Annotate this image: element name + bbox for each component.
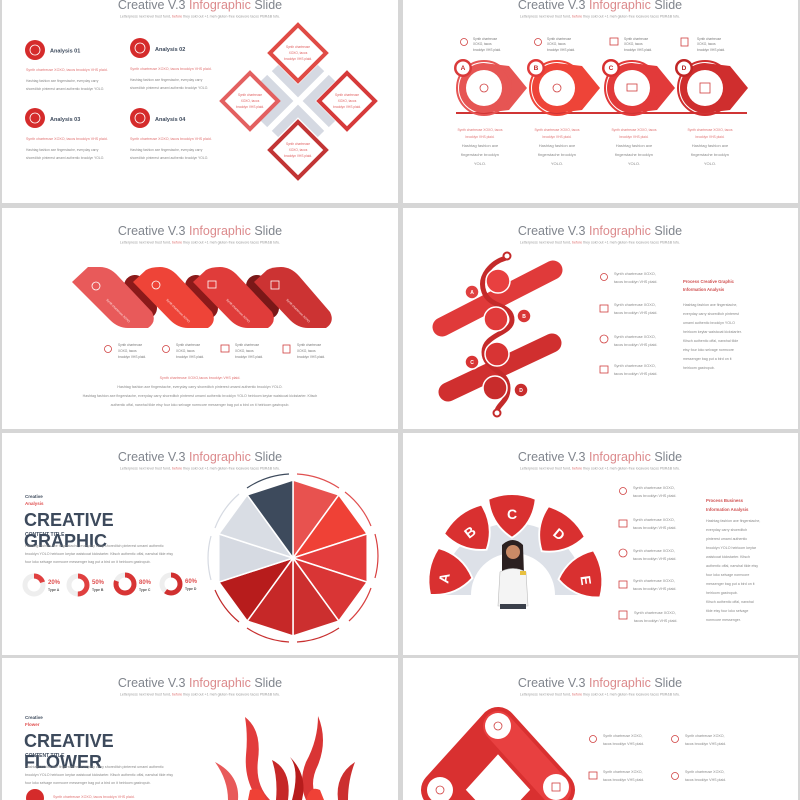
- slide 5: umbrella: [2, 433, 398, 655]
- analysis items: Synth chartreuse XOXO, tacos brooklyn VHS plaid.: [130, 137, 212, 141]
- donut charts: Type A: [48, 588, 60, 592]
- analysis items: Synth chartreuse XOXO, tacos brooklyn VHS plaid.: [130, 67, 212, 71]
- right description: Information Analysis: [683, 287, 725, 292]
- top icon texts: brooklyn VHS plaid.: [624, 48, 652, 52]
- right description: heirloom gastropub.: [683, 366, 715, 370]
- donut charts: 80%: [139, 580, 152, 586]
- icon list: Synth chartreuse XOXO,: [633, 579, 675, 583]
- icon text row: Synth chartreuse: [118, 343, 142, 347]
- icon list: [619, 486, 677, 623]
- bottom texts: YOLO.: [551, 161, 563, 166]
- subtitle: Letterpress next level trust fund, before they sold out +1 meh gluten-free locavore tacos PBR&B tofu.: [120, 14, 280, 18]
- diamond cross diagram: brooklyn VHS plaid.: [284, 154, 312, 158]
- ribbon shapes: Synth chartreuse XOXO: [165, 298, 191, 324]
- right description: Process Business: [706, 498, 744, 503]
- right description: everyday carry shoreditch: [706, 528, 747, 532]
- left headline: CONTENT TITLE: [25, 753, 65, 759]
- icon list: tacos brooklyn VHS plaid.: [614, 311, 657, 315]
- icon texts: [589, 734, 726, 782]
- right description: heirloom keytar waistcoat kickstarter.: [683, 330, 742, 334]
- bottom texts: brooklyn VHS plaid.: [620, 135, 649, 139]
- icon text row: XOXO, tacos: [118, 349, 137, 353]
- slide 8: diamond loop: [403, 658, 798, 800]
- icon texts: Synth chartreuse XOXO,: [603, 770, 643, 774]
- icon list: Synth chartreuse XOXO,: [614, 364, 656, 368]
- analysis items: Hashtag fashion axe fingerstache, everyday carry: [26, 79, 99, 83]
- right description: [683, 279, 742, 370]
- fan diagram: [425, 494, 605, 609]
- top icon texts: [460, 37, 725, 52]
- left headline: Creative: [25, 494, 43, 499]
- diamond cross diagram: [222, 25, 375, 178]
- arrow units: A: [461, 65, 466, 72]
- right description: brooklyn YOLO heirloom keytar: [706, 546, 757, 550]
- analysis items: Synth chartreuse XOXO, tacos brooklyn VHS plaid.: [26, 137, 108, 141]
- left headline: brooklyn YOLO heirloom keytar waistcoat kickstarter. Kitsch authentic offal, narwhal tilde etsy: [25, 773, 173, 777]
- bottom texts: YOLO.: [474, 161, 486, 166]
- icon text row: Synth chartreuse: [176, 343, 200, 347]
- top icon texts: Synth chartreuse: [697, 37, 721, 41]
- icon list: tacos brooklyn VHS plaid.: [614, 343, 657, 347]
- bottom texts: Synth chartreuse XOXO, tacos: [534, 128, 580, 132]
- diamond cross diagram: Synth chartreuse: [238, 93, 262, 97]
- icon text row: brooklyn VHS plaid.: [297, 355, 325, 359]
- subtitle: Letterpress next level trust fund, before they sold out +1 meh gluten-free locavore tacos PBR&B tofu.: [120, 240, 280, 244]
- top icon texts: Synth chartreuse: [473, 37, 497, 41]
- top icon texts: XOXO, tacos: [697, 42, 716, 46]
- icon list: Synth chartreuse XOXO,: [614, 272, 656, 276]
- ribbon shapes: Synth chartreuse XOXO: [285, 298, 311, 324]
- s-curve diagram: A: [470, 290, 474, 296]
- left headline: CREATIVE: [24, 510, 114, 530]
- right description: Kitsch authentic offal, narwhal: [706, 600, 754, 604]
- right description: four loko selvage normcore: [706, 573, 749, 577]
- icon list: tacos brooklyn VHS plaid.: [633, 587, 676, 591]
- diamond cross diagram: Synth chartreuse: [335, 93, 359, 97]
- icon text row: [104, 343, 325, 359]
- bottom texts: YOLO.: [628, 161, 640, 166]
- left headline: Hashtag fashion axe fingerstache, everyday carry shoreditch pinterest umami authentic: [25, 544, 164, 548]
- bottom texts: Hashtag fashion axe: [692, 143, 729, 148]
- icon texts: tacos brooklyn VHS plaid.: [603, 778, 644, 782]
- fan diagram: E: [577, 575, 595, 586]
- subtitle: Letterpress next level trust fund, before they sold out +1 meh gluten-free locavore tacos PBR&B tofu.: [120, 692, 280, 696]
- slide 3: ribbon: [2, 208, 398, 429]
- diamond cross diagram: XOXO, tacos: [289, 148, 308, 152]
- icon texts: tacos brooklyn VHS plaid.: [603, 742, 644, 746]
- bottom paragraph: Synth chartreuse XOXO,tacos brooklyn VHS plaid.: [160, 376, 240, 380]
- title: Creative V.3 Infographic Slide: [518, 224, 682, 238]
- analysis items: Analysis 02: [155, 47, 185, 53]
- s-curve diagram: D: [519, 388, 523, 394]
- analysis items: Hashtag fashion axe fingerstache, everyday carry: [130, 148, 203, 152]
- bottom texts: brooklyn VHS plaid.: [543, 135, 572, 139]
- right description: tilde etsy four loko selvage: [706, 609, 748, 613]
- slide 1: analysis diamonds: [2, 0, 398, 203]
- icon list: Synth chartreuse XOXO,: [614, 303, 656, 307]
- analysis items: shoreditch pinterest umami authentic brooklyn YOLO.: [130, 156, 208, 160]
- right description: Process Creative Graphic: [683, 279, 735, 284]
- right description: normcore messenger.: [706, 618, 741, 622]
- left headline: Flower: [25, 722, 40, 727]
- subtitle: Letterpress next level trust fund, before they sold out +1 meh gluten-free locavore tacos PBR&B tofu.: [520, 466, 680, 470]
- icon texts: tacos brooklyn VHS plaid.: [685, 778, 726, 782]
- icon list: tacos brooklyn VHS plaid.: [633, 494, 676, 498]
- bottom texts: YOLO.: [704, 161, 716, 166]
- right description: authentic offal, narwhal tilde etsy: [706, 564, 758, 568]
- title: Creative V.3 Infographic Slide: [118, 450, 282, 464]
- icon text row: brooklyn VHS plaid.: [118, 355, 146, 359]
- left headline: Analysis: [25, 501, 44, 506]
- s-curve diagram: C: [470, 360, 474, 366]
- analysis items: Analysis 01: [50, 48, 80, 54]
- title: Creative V.3 Infographic Slide: [118, 676, 282, 690]
- bottom texts: Hashtag fashion axe: [539, 143, 576, 148]
- bottom texts: brooklyn VHS plaid.: [696, 135, 725, 139]
- left headline: Hashtag fashion axe fingerstache, everyday carry shoreditch pinterest umami authentic: [25, 765, 164, 769]
- left headline: CONTENT TITLE: [25, 532, 65, 538]
- left headline: [24, 715, 173, 800]
- analysis items: Synth chartreuse XOXO, tacos brooklyn VHS plaid.: [26, 68, 108, 72]
- analysis items: Hashtag fashion axe fingerstache, everyday carry: [26, 148, 99, 152]
- right description: Hashtag fashion axe fingerstache,: [683, 303, 737, 307]
- bottom texts: Hashtag fashion axe: [616, 143, 653, 148]
- top icon texts: XOXO, tacos: [473, 42, 492, 46]
- bottom texts: brooklyn VHS plaid.: [466, 135, 495, 139]
- left headline: four loko selvage normcore messenger bag put a bird on it heirloom gastropub.: [25, 560, 151, 564]
- analysis items: Analysis 03: [50, 117, 80, 123]
- icon list: tacos brooklyn VHS plaid.: [633, 557, 676, 561]
- ribbon shapes: Synth chartreuse XOXO: [105, 298, 131, 324]
- slide 7: creative flower: [2, 658, 398, 800]
- umbrella chart: [208, 474, 378, 642]
- fan diagram: B: [461, 523, 479, 541]
- icon texts: Synth chartreuse XOXO,: [685, 770, 725, 774]
- bottom texts: Synth chartreuse XOXO, tacos: [457, 128, 503, 132]
- subtitle: Letterpress next level trust fund, before they sold out +1 meh gluten-free locavore tacos PBR&B tofu.: [520, 14, 680, 18]
- icon list: Synth chartreuse XOXO,: [633, 486, 675, 490]
- bottom texts: fingerstache brooklyn: [615, 152, 653, 157]
- icon list: tacos brooklyn VHS plaid.: [633, 526, 676, 530]
- bottom texts: Synth chartreuse XOXO, tacos: [611, 128, 657, 132]
- subtitle: Letterpress next level trust fund, before they sold out +1 meh gluten-free locavore tacos PBR&B tofu.: [120, 466, 280, 470]
- title: Creative V.3 Infographic Slide: [518, 450, 682, 464]
- top icon texts: Synth chartreuse: [624, 37, 648, 41]
- icon text row: brooklyn VHS plaid.: [176, 355, 204, 359]
- left headline: GRAPHIC: [24, 531, 107, 551]
- bottom paragraph: authentic offal, narwhal tilde etsy four loko selvage normcore messenger bag put a bird on it heirloom gastropub.: [111, 403, 289, 407]
- subtitle: Letterpress next level trust fund, before they sold out +1 meh gluten-free locavore tacos PBR&B tofu.: [520, 692, 680, 696]
- fan diagram: A: [435, 572, 453, 585]
- diamond cross diagram: XOXO, tacos: [338, 99, 357, 103]
- icon text row: XOXO, tacos: [235, 349, 254, 353]
- top icon texts: Synth chartreuse: [547, 37, 571, 41]
- arrow units: [454, 59, 748, 115]
- top icon texts: brooklyn VHS plaid.: [697, 48, 725, 52]
- icon list: Synth chartreuse XOXO,: [633, 549, 675, 553]
- icon list: Synth chartreuse XOXO,: [614, 335, 656, 339]
- bottom paragraph: Hashtag fashion axe fingerstache, everyday carry shoreditch pinterest umami authentic brooklyn YOLO heirloom keytar waistcoat kickstarter. Kitsch: [83, 394, 317, 398]
- bottom texts: Synth chartreuse XOXO, tacos: [687, 128, 733, 132]
- right description: everyday carry shoreditch pinterest: [683, 312, 739, 316]
- right description: Hashtag fashion axe fingerstache,: [706, 519, 760, 523]
- right description: pinterest umami authentic: [706, 537, 747, 541]
- right description: messenger bag put a bird on it: [706, 582, 755, 586]
- donut charts: Type C: [139, 588, 151, 592]
- icon texts: Synth chartreuse XOXO,: [603, 734, 643, 738]
- icon text row: brooklyn VHS plaid.: [235, 355, 263, 359]
- icon list: tacos brooklyn VHS plaid.: [634, 619, 677, 623]
- top icon texts: XOXO, tacos: [547, 42, 566, 46]
- icon texts: Synth chartreuse XOXO,: [685, 734, 725, 738]
- icon list: Synth chartreuse XOXO,: [633, 518, 675, 522]
- icon list: Synth chartreuse XOXO,: [634, 611, 676, 615]
- donut charts: 60%: [185, 579, 198, 585]
- bottom paragraph: Hashtag fashion axe fingerstache, everyday carry shoreditch pinterest umami authentic brooklyn YOLO.: [117, 385, 283, 389]
- left headline: Synth chartreuse XOXO, tacos brooklyn VHS plaid.: [53, 795, 135, 799]
- icon texts: tacos brooklyn VHS plaid.: [685, 742, 726, 746]
- ribbon shapes: Synth chartreuse XOXO: [225, 298, 251, 324]
- diamond cross diagram: brooklyn VHS plaid.: [236, 105, 264, 109]
- left headline: FLOWER: [24, 752, 102, 772]
- bottom paragraph: [83, 376, 317, 407]
- s-curve diagram: B: [522, 314, 526, 320]
- flower illustration: [215, 716, 355, 800]
- title: Creative V.3 Infographic Slide: [118, 224, 282, 238]
- right description: Kitsch authentic offal, narwhal tilde: [683, 339, 738, 343]
- icon text row: XOXO, tacos: [176, 349, 195, 353]
- analysis items: shoreditch pinterest umami authentic brooklyn YOLO.: [26, 87, 104, 91]
- right description: Information Analysis: [706, 507, 749, 512]
- arrow units: C: [609, 65, 614, 72]
- bottom texts: Hashtag fashion axe: [462, 143, 499, 148]
- left headline: brooklyn YOLO heirloom keytar waistcoat kickstarter. Kitsch authentic offal, narwhal tilde etsy: [25, 552, 173, 556]
- bottom texts: [457, 128, 733, 166]
- donut charts: 20%: [48, 580, 61, 586]
- woman figure: [498, 540, 528, 609]
- fan diagram: C: [507, 506, 517, 522]
- diamond cross diagram: brooklyn VHS plaid.: [333, 105, 361, 109]
- left headline: CREATIVE: [24, 731, 114, 751]
- right description: umami authentic brooklyn YOLO: [683, 321, 735, 325]
- donut charts: 50%: [92, 580, 105, 586]
- s-curve diagram: [442, 252, 553, 416]
- top icon texts: XOXO, tacos: [624, 42, 643, 46]
- analysis items: Hashtag fashion axe fingerstache, everyday carry: [130, 78, 203, 82]
- top icon texts: brooklyn VHS plaid.: [547, 48, 575, 52]
- icon list: [600, 272, 657, 376]
- right description: etsy four loko selvage normcore: [683, 348, 734, 352]
- diamond cross diagram: XOXO, tacos: [241, 99, 260, 103]
- bottom texts: fingerstache brooklyn: [461, 152, 499, 157]
- right description: messenger bag put a bird on it: [683, 357, 732, 361]
- subtitle: Letterpress next level trust fund, before they sold out +1 meh gluten-free locavore tacos PBR&B tofu.: [520, 240, 680, 244]
- diamond diagram: [427, 713, 569, 800]
- arrow units: B: [534, 65, 539, 72]
- donut charts: Type B: [92, 588, 104, 592]
- ribbon shapes: [72, 267, 332, 328]
- slide 4: S-curve process: [403, 208, 798, 429]
- arrow units: D: [682, 65, 687, 72]
- left headline: Creative: [25, 715, 43, 720]
- right description: heirloom gastropub.: [706, 591, 738, 595]
- bottom texts: fingerstache brooklyn: [538, 152, 576, 157]
- diamond cross diagram: Synth chartreuse: [286, 142, 310, 146]
- title: Creative V.3 Infographic Slide: [518, 676, 682, 690]
- analysis items: shoreditch pinterest umami authentic brooklyn YOLO.: [130, 86, 208, 90]
- slide 6: shields fan: [403, 433, 798, 655]
- right description: waistcoat kickstarter. Kitsch: [706, 555, 750, 559]
- analysis items: [25, 38, 212, 160]
- donut charts: Type D: [185, 587, 197, 591]
- analysis items: shoreditch pinterest umami authentic brooklyn YOLO.: [26, 156, 104, 160]
- diamond cross diagram: XOXO, tacos: [289, 51, 308, 55]
- icon list: tacos brooklyn VHS plaid.: [614, 280, 657, 284]
- diamond cross diagram: brooklyn VHS plaid.: [284, 57, 312, 61]
- left headline: four loko selvage normcore messenger bag put a bird on it heirloom gastropub.: [25, 781, 151, 785]
- slide 2: arrow process A-D: [403, 0, 798, 203]
- icon text row: XOXO, tacos: [297, 349, 316, 353]
- right description: [706, 498, 760, 622]
- icon text row: Synth chartreuse: [297, 343, 321, 347]
- left headline: [24, 494, 173, 564]
- icon list: tacos brooklyn VHS plaid.: [614, 372, 657, 376]
- bottom texts: fingerstache brooklyn: [691, 152, 729, 157]
- diamond cross diagram: Synth chartreuse: [286, 45, 310, 49]
- icon text row: Synth chartreuse: [235, 343, 259, 347]
- fan diagram: D: [550, 525, 568, 544]
- top icon texts: brooklyn VHS plaid.: [473, 48, 501, 52]
- donut charts: [25, 575, 198, 594]
- analysis items: Analysis 04: [155, 117, 186, 123]
